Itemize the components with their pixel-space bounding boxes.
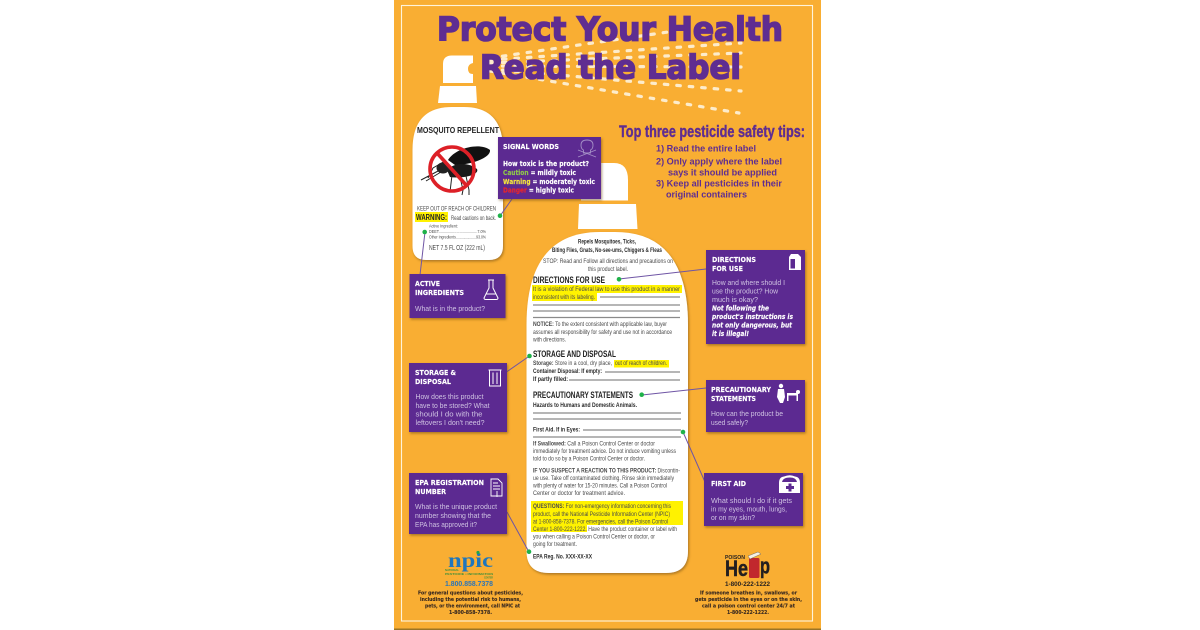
signal words list: Caution = mildly toxic [503,169,576,177]
small bottle: mosquito repellent: Read cautions on back. [451,215,496,222]
label intro [543,238,673,273]
label section: questions: Center 1-800-222-1222. Have the product container or label with [533,526,677,533]
icon: skull and crossbones [578,140,596,157]
label section: first aid text [532,440,680,497]
title: Read the Label [480,48,741,86]
label intro: this product label. [588,266,628,273]
heading: top three tips: Top three pesticide safety tips: [619,122,805,141]
icon: crossed out mosquito [421,146,490,195]
storage question: should I do with the [416,410,482,418]
EPA question: number showing that the [415,511,491,520]
directions warning: not only dangerous, but [712,322,793,330]
large bottle collar [578,204,638,229]
label intro: STOP: Read and Follow all directions and precautions on [543,258,673,265]
EPA heading [415,479,484,496]
signal words list: Warning = moderately toxic [503,178,595,186]
large bottle body [526,232,688,573]
label section: first aid text: IF YOU SUSPECT A REACTION TO THIS PRODUCT: Discontin- [533,468,680,474]
large bottle: product label [526,163,688,573]
label section: directions for use: It is a violation of Federal law to use this product in a manner [533,286,680,293]
small bottle nozzle [443,56,473,83]
storage question: have to be stored? What [416,401,490,410]
storage question: leftovers I don't need? [416,418,485,427]
NPIC logo [445,550,493,588]
NPIC logo: PESTICIDE ▪ INFORMATION [445,572,493,576]
first aid question: in my eyes, mouth, lungs, [711,504,787,514]
NPIC contact text: pets, or the environment, call NPIC at [425,604,520,610]
directions question: much is okay? [712,295,758,304]
label section: first aid text: ue use. Take off contaminated clothing. Rinse skin immediately [533,475,675,482]
storage heading: STORAGE & [415,369,456,377]
label section: first aid text: Center or doctor for treatment advice. [533,490,625,497]
panel: precautionary statements [706,380,805,432]
small bottle: mosquito repellent: NET 7.5 FL OZ (222 mL) [429,245,485,252]
storage heading: DISPOSAL [415,378,451,386]
Poison Help logo: He [725,556,748,581]
panel: storage and disposal [409,363,507,432]
EPA question [415,502,497,529]
small bottle: mosquito repellent: Other Ingredients.....................93.0% [429,234,486,240]
panel: signal words [498,137,601,199]
label section: storage and disposal [533,349,680,383]
NPIC logo: npic [448,550,493,572]
label intro: Repels Mosquitoes, Ticks, [578,238,636,246]
directions heading: FOR USE [712,265,743,273]
label section: first aid text: with plenty of water for 15-20 minutes. Call a Poison Control [532,482,667,490]
precautionary question: How can the product be [711,409,783,418]
icon: container [789,254,801,270]
large bottle nozzle [581,163,628,200]
label section: questions: at 1-800-858-7378. For emergencies, call the Poison Control [533,518,668,526]
NPIC contact text: For general questions about pesticides, [418,590,523,596]
Poison Help contact text: gets pesticide in the eyes or on the skin, [695,597,802,603]
active ingredients heading: ACTIVE [415,280,440,288]
active ingredients question: What is in the product? [415,304,485,313]
icon: person and dog [777,384,800,403]
label section: storage and disposal: Storage: Store in a cool, dry place, [533,360,612,367]
label EPA number: EPA Reg. No. XXX-XX-XX [533,554,593,560]
NPIC contact text: 1-800-858-7378. [449,610,492,616]
label section: storage and disposal: out of reach of children. [615,360,667,367]
Poison Help contact text: call a poison control center 24/7 at [702,604,795,610]
precautionary heading: PRECAUTIONARY [711,386,772,394]
label section: questions [531,501,683,548]
active ingredients heading: INGREDIENTS [415,289,464,297]
label section: first aid text: immediately for treatment advice. Do not induce vomiting unless [533,448,676,455]
small bottle warnings: KEEP OUT OF REACH OF CHILDREN [417,206,496,212]
panel: active ingredients [410,274,506,318]
NPIC contact text: including the potential risk to humans, [420,597,521,603]
active ingredients heading [415,280,464,297]
label section: first aid text: told to do so by a Poison Control Center or doctor. [533,456,645,462]
directions question: use the product? How [712,286,779,296]
icon: trash can [488,370,502,386]
precautionary heading: STATEMENTS [711,395,756,403]
panel: directions for use [706,250,805,344]
label notice: NOTICE: To the extent consistent with applicable law, buyer [533,321,667,328]
storage question [416,392,490,427]
small bottle ingredients: Active Ingredient: [429,224,458,228]
NPIC contact text [418,590,523,616]
signal words list [503,160,595,194]
poster background [394,0,821,630]
first aid heading: FIRST AID [711,480,746,488]
small bottle: mosquito repellent: WARNING: [416,213,447,222]
signal words list: How toxic is the product? [503,160,589,168]
EPA question: EPA has approved it? [415,520,477,529]
directions warning [711,304,793,338]
Poison Help contact text [695,590,802,616]
label section: questions: QUESTIONS: For non-emergency information concerning this [533,503,671,510]
storage question: How does this product [416,392,484,401]
tips list: 3) Keep all pesticides in their [656,178,782,190]
Poison Help logo: POISON [725,555,745,561]
label section: questions: you when calling a Poison Control Center or doctor, or [533,534,655,540]
label section: directions for use [532,275,682,318]
small bottle: mosquito repellent: DEET.....................................7.0% [429,229,486,234]
label section: first aid text: If Swallowed: Call a Poison Control Center or doctor [533,440,655,448]
small bottle: mosquito repellent [412,56,503,260]
first aid question: or on my skin? [711,513,755,522]
signal words list: Danger = highly toxic [503,186,574,194]
connector dots [422,213,685,554]
tips list: original containers [666,190,747,200]
label section: storage and disposal: If partly filled: [533,376,568,383]
icon: flask [484,280,498,300]
icon: first aid kit [779,475,800,493]
tips list: 2) Only apply where the label [656,156,782,168]
label section: storage and disposal: Container Disposal: If empty: [533,368,602,375]
EPA heading: EPA REGISTRATION [415,479,484,487]
Poison Help logo: p [760,554,770,578]
tips list: says it should be applied [668,168,777,178]
precautionary heading [711,386,772,403]
connector lines [420,199,706,552]
directions question: How and where should I [712,278,785,287]
label section: questions: going for treatment. [533,541,577,548]
Poison Help logo [725,552,770,588]
NPIC logo: 1.800.858.7378 [445,581,493,588]
label notice [532,321,672,344]
panel: EPA registration number [409,473,507,534]
directions warning: it is illegal! [712,330,749,338]
tips list [656,144,782,200]
directions question [712,278,785,304]
label intro: Biting Flies, Gnats, No-see-ums, Chiggers & Fleas [552,247,662,254]
title: Protect Your Health [437,10,783,48]
Poison Help logo: l [751,556,758,581]
label section: directions for use: DIRECTIONS FOR USE [533,275,605,285]
NPIC logo: NATIONAL [445,568,459,572]
label notice: assumes all responsibility for safety and use not in accordance [533,329,672,336]
icon: document [491,479,502,497]
EPA heading: NUMBER [415,488,447,496]
panel: first aid [704,473,803,526]
Poison Help contact text: 1-800-222-1222. [727,610,769,616]
label section: precautionary statements: Hazards to Humans and Domestic Animals. [533,402,637,409]
first aid question: What should I do if it gets [711,496,792,505]
storage heading [415,369,456,386]
spray mist [490,32,741,113]
first aid question [711,496,792,522]
directions warning: Not following the [712,304,769,312]
label section: directions for use: inconsistent with its labeling. [533,294,595,301]
directions warning: product's instructions is [711,313,793,321]
small bottle body [412,107,503,260]
directions heading: DIRECTIONS [712,256,756,264]
label section: precautionary statements: PRECAUTIONARY STATEMENTS [533,390,633,400]
precautionary question: used safely? [711,418,748,427]
label section: questions: product, call the National Pesticide Information Center (NPIC) [533,511,670,518]
Poison Help logo: 1-800-222-1222 [725,581,770,588]
signal words heading: SIGNAL WORDS [503,143,559,151]
label section: precautionary statements [533,390,681,437]
label notice: with directions. [532,336,566,344]
title [437,10,783,86]
small bottle product name: MOSQUITO REPELLENT [417,125,500,135]
NPIC logo: CENTER [484,576,493,580]
EPA question: What is the unique product [415,502,497,511]
directions heading [712,256,756,273]
tips list: 1) Read the entire label [656,144,756,154]
small bottle collar [438,86,477,103]
label section: storage and disposal: STORAGE AND DISPOSAL [533,349,616,359]
Poison Help contact text: If someone breathes in, swallows, or [700,590,797,596]
precautionary question [711,409,783,427]
label section: precautionary statements: First Aid. If in Eyes: [533,426,580,434]
